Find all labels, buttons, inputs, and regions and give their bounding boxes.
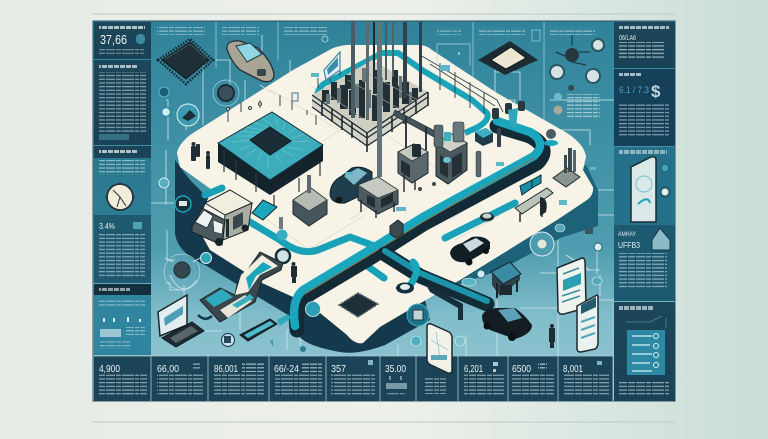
icon: clock [105,182,135,210]
device nodes right [407,224,602,346]
node: truck badge [159,178,191,212]
factory: deck and frame [312,60,428,152]
truck [192,190,283,246]
left column: top statistic panel: 37,66 [100,32,127,47]
floor chip [339,293,378,317]
platform top surface [177,45,593,343]
stat: 6,201: 6,201 [464,363,483,375]
left column: barcode panel [94,284,151,355]
left column: top statistic panel [94,22,151,59]
conveyor end cylinders [492,101,525,128]
desk workstation [515,175,553,222]
stat: 6500 [512,362,554,396]
top callout: frame device [437,28,470,66]
stat: middle text [425,378,446,394]
icon: gear sensor [164,254,200,290]
left column: clock panel [94,146,151,283]
conveyor nodes [200,212,494,316]
small machine on right [544,129,580,187]
left column: clock panel: 3.4% [99,222,115,231]
car: on white floor [450,237,490,266]
right column: phone panel: AMHAY [618,232,636,238]
floor markings [250,85,510,255]
stat: 4,900: 4,900 [99,363,120,375]
stat: 357 [331,360,375,396]
tablet: B [577,295,598,352]
USB drive device [240,314,291,341]
stat: 86,001 [214,362,264,396]
top callout: circular components and text [550,28,604,118]
right column: list panel [614,302,675,401]
factory: machine one [393,110,437,192]
stat: 357: 357 [331,363,346,375]
left column: text panel [94,60,151,145]
main frame [93,21,675,401]
top callout: chip [157,27,213,84]
stat: 66,00: 66,00 [157,363,179,375]
hut [491,262,521,298]
top callout: text [284,27,328,42]
icon: small badges lower left [222,334,306,352]
connector lines [144,35,630,356]
right column: phone panel [614,147,675,301]
right column: dollar panel: 6.1 / 7.3 [619,85,649,95]
tablet: A [557,258,586,314]
stat: 8,001: 8,001 [563,363,583,375]
stat: 66/-24 [274,362,322,396]
sparkle cyan labels on floor [311,65,596,211]
right column: dollar panel [614,69,675,146]
gate machine [198,252,283,322]
people [191,142,555,348]
stat: 66,00 [157,362,204,396]
second conveyor [385,251,487,320]
stat: 8,001 [563,361,609,396]
factory: central processing machine right [358,177,403,238]
stat: 4,900 [99,363,147,396]
right column: phone panel: UFFB3 [618,241,640,250]
factory: machine two [418,122,501,191]
upper cyan strip [317,53,488,133]
factory: towers [351,22,422,177]
right column: dollar panel: $ [651,82,661,101]
car: parked near chip building [330,167,372,204]
posts and markers [226,95,316,125]
stat: 35.00 [385,363,407,396]
stat: 6,201 [464,362,504,396]
stat: 6500: 6500 [512,363,531,375]
sign [292,52,340,101]
stat: 86,001: 86,001 [214,363,238,375]
computer: monitor and keyboard [158,295,204,347]
right column: top panel [614,22,675,68]
railing [318,55,503,114]
top callout: flat chip [478,28,540,75]
platform side wall [175,160,598,353]
tablet: C map phone [427,324,452,373]
chip building [218,112,323,206]
stat: 66/-24: 66/-24 [274,363,299,375]
top callout: handheld device [221,27,274,82]
factory: central processing machine left [293,175,327,226]
icon: small badges [159,80,239,126]
stat: 35.00: 35.00 [385,363,406,375]
car: front black sedan [482,308,532,341]
main conveyor [294,121,543,330]
cyan floor paths [205,188,515,278]
right column: top panel: 06/LA6 [619,35,636,42]
bottom stat row [94,302,613,401]
